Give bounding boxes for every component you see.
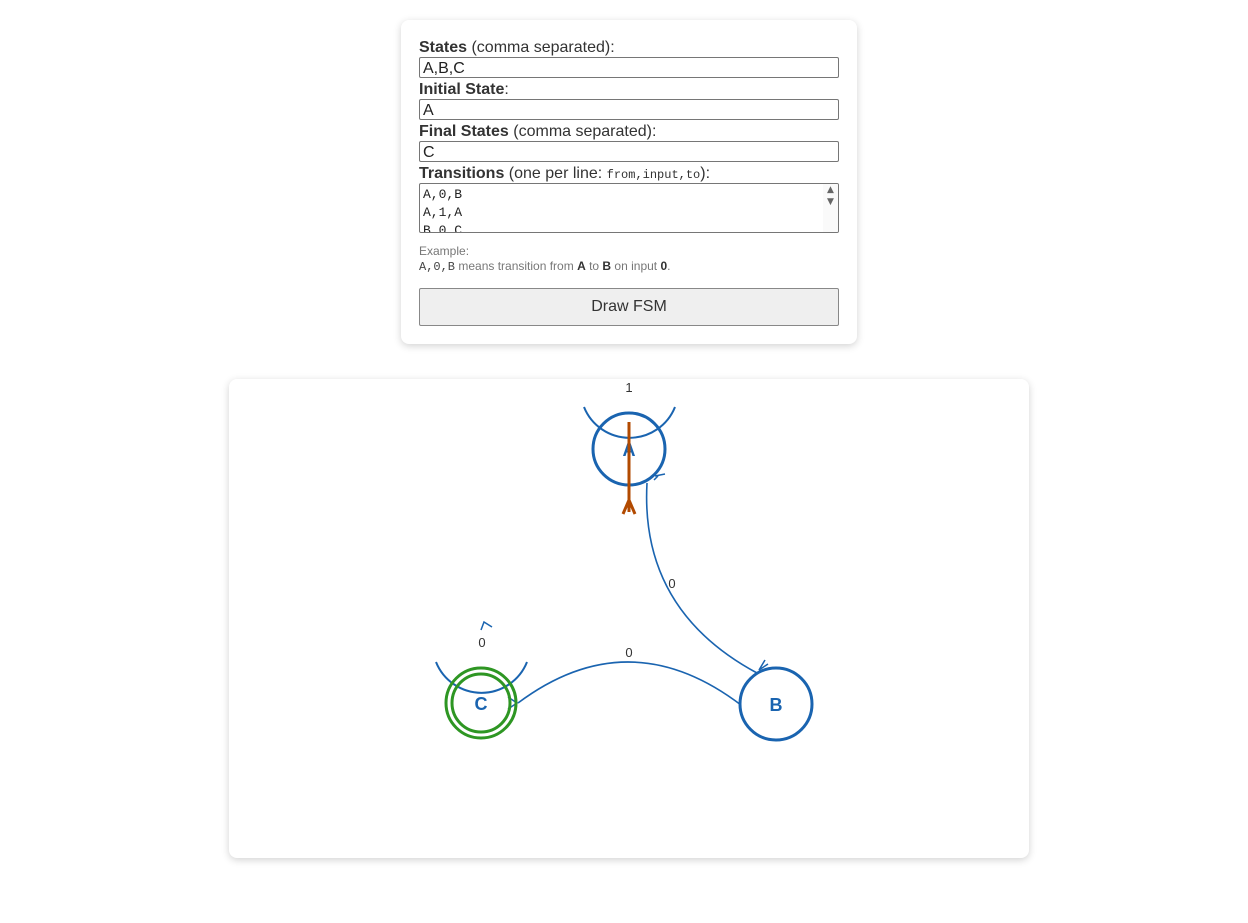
example note (419, 244, 670, 274)
state B (740, 668, 812, 740)
edge C-B: 0 (625, 645, 633, 660)
input: final states: C (423, 144, 435, 161)
label: transitions: Transitions (one per line: from,input,to): (419, 165, 710, 182)
edge A-B: 0 (668, 576, 676, 591)
textarea: transitions: A,0,B (423, 187, 462, 202)
panel: input form (401, 20, 857, 344)
initial arrow (623, 422, 635, 514)
panel: fsm diagram (229, 379, 1029, 858)
textarea: transitions (419, 183, 839, 233)
state B: B (770, 695, 782, 715)
input: initial state: A (423, 102, 434, 119)
state C (final): C (474, 694, 488, 714)
input: final states (419, 141, 839, 162)
self-loop A: 1 (625, 380, 633, 395)
textarea: transitions: A,1,A (423, 205, 462, 220)
state C (final) (446, 668, 516, 738)
button: draw fsm (419, 288, 839, 326)
input: states (419, 57, 839, 78)
scrollbar: ▲ (827, 185, 834, 195)
label: states: States (comma separated): (419, 39, 615, 56)
state A: A (622, 440, 636, 460)
scrollbar: ▼ (827, 197, 834, 207)
self-loop C (436, 622, 527, 693)
edge C-B (508, 645, 741, 709)
label: initial state: Initial State: (419, 81, 509, 98)
input: initial state (419, 99, 839, 120)
scrollbar (823, 184, 838, 232)
label: final states: Final States (comma separated): (419, 123, 656, 140)
self-loop C: 0 (478, 635, 486, 650)
example note: Example: (419, 244, 469, 258)
input: states: A,B,C (423, 60, 465, 77)
self-loop A (584, 380, 675, 438)
example note: A,0,B means transition from A to B on input 0. (419, 259, 670, 274)
state A (593, 413, 665, 485)
edge A-B (647, 474, 768, 673)
button: draw fsm: Draw FSM (591, 298, 667, 315)
